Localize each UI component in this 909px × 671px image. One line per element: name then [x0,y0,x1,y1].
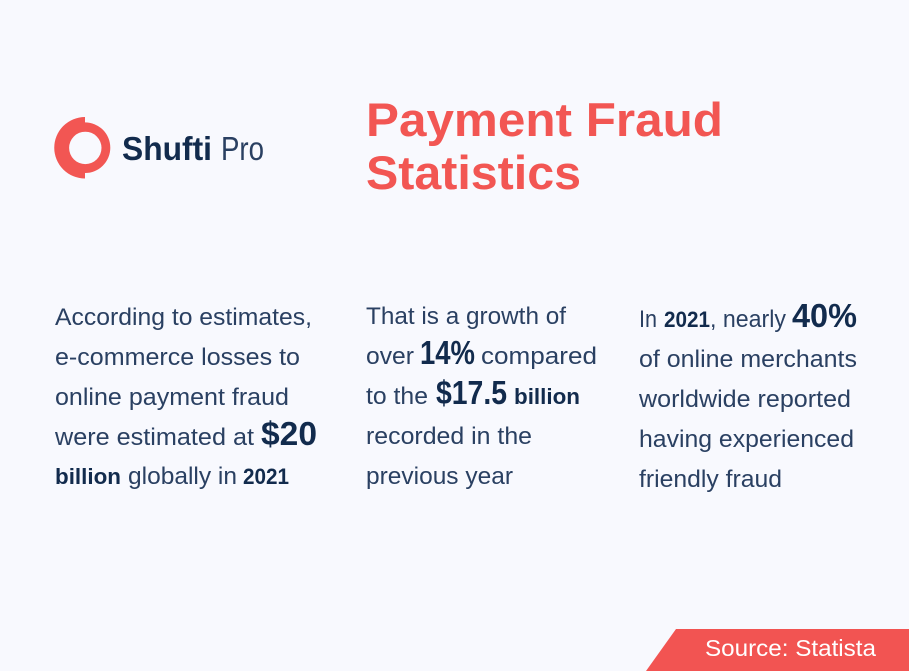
text block: friendly fraud: In [639,306,657,333]
text block: e-commerce losses: According to estimates, [55,304,312,331]
stat: $20: $20 [261,415,317,452]
text block: growth comparison: compared [481,343,597,370]
text block: e-commerce losses: e-commerce losses to [55,344,300,371]
text block: growth comparison [366,303,597,490]
text block: growth comparison: recorded in the [366,423,532,450]
logo: Shufti Pro [54,117,264,178]
text block: friendly fraud: 2021 [664,307,710,332]
stat: 40%: 40% [792,297,857,334]
text block: growth comparison: over [366,343,414,370]
logo wordmark: Pro [221,130,264,167]
text block: e-commerce losses: globally in [128,463,237,490]
logo wordmark [122,130,264,167]
text block: growth comparison: previous year [366,463,513,490]
text block: growth comparison: to the [366,383,428,410]
text block: e-commerce losses: 2021 [243,464,289,489]
text block: e-commerce losses [54,304,317,490]
source banner [646,629,909,671]
stat: $17.5 billion [436,374,580,411]
text block: growth comparison: That is a growth of [366,303,566,330]
text block: e-commerce losses: online payment fraud [55,384,289,411]
stat: $17.5 billion: billion [514,384,580,409]
text block: friendly fraud: of online merchants [639,346,857,373]
text block: friendly fraud [638,297,857,493]
logo wordmark: Shufti [122,130,212,167]
title [366,93,723,199]
source banner: Source: Statista [705,635,876,661]
stat: 14%: 14% [420,334,475,371]
text block: friendly fraud: friendly fraud [639,466,782,493]
text block: friendly fraud: having experienced [639,426,854,453]
text block: friendly fraud: , nearly [710,306,787,333]
text block: friendly fraud: worldwide reported [638,386,851,413]
title: Payment Fraud [366,93,723,146]
text block: e-commerce losses: billion [55,464,121,489]
icon: offset coral ring [54,117,110,178]
stat: $17.5 billion: $17.5 [436,374,507,411]
title: Statistics [366,146,581,199]
text block: e-commerce losses: were estimated at [54,424,254,451]
